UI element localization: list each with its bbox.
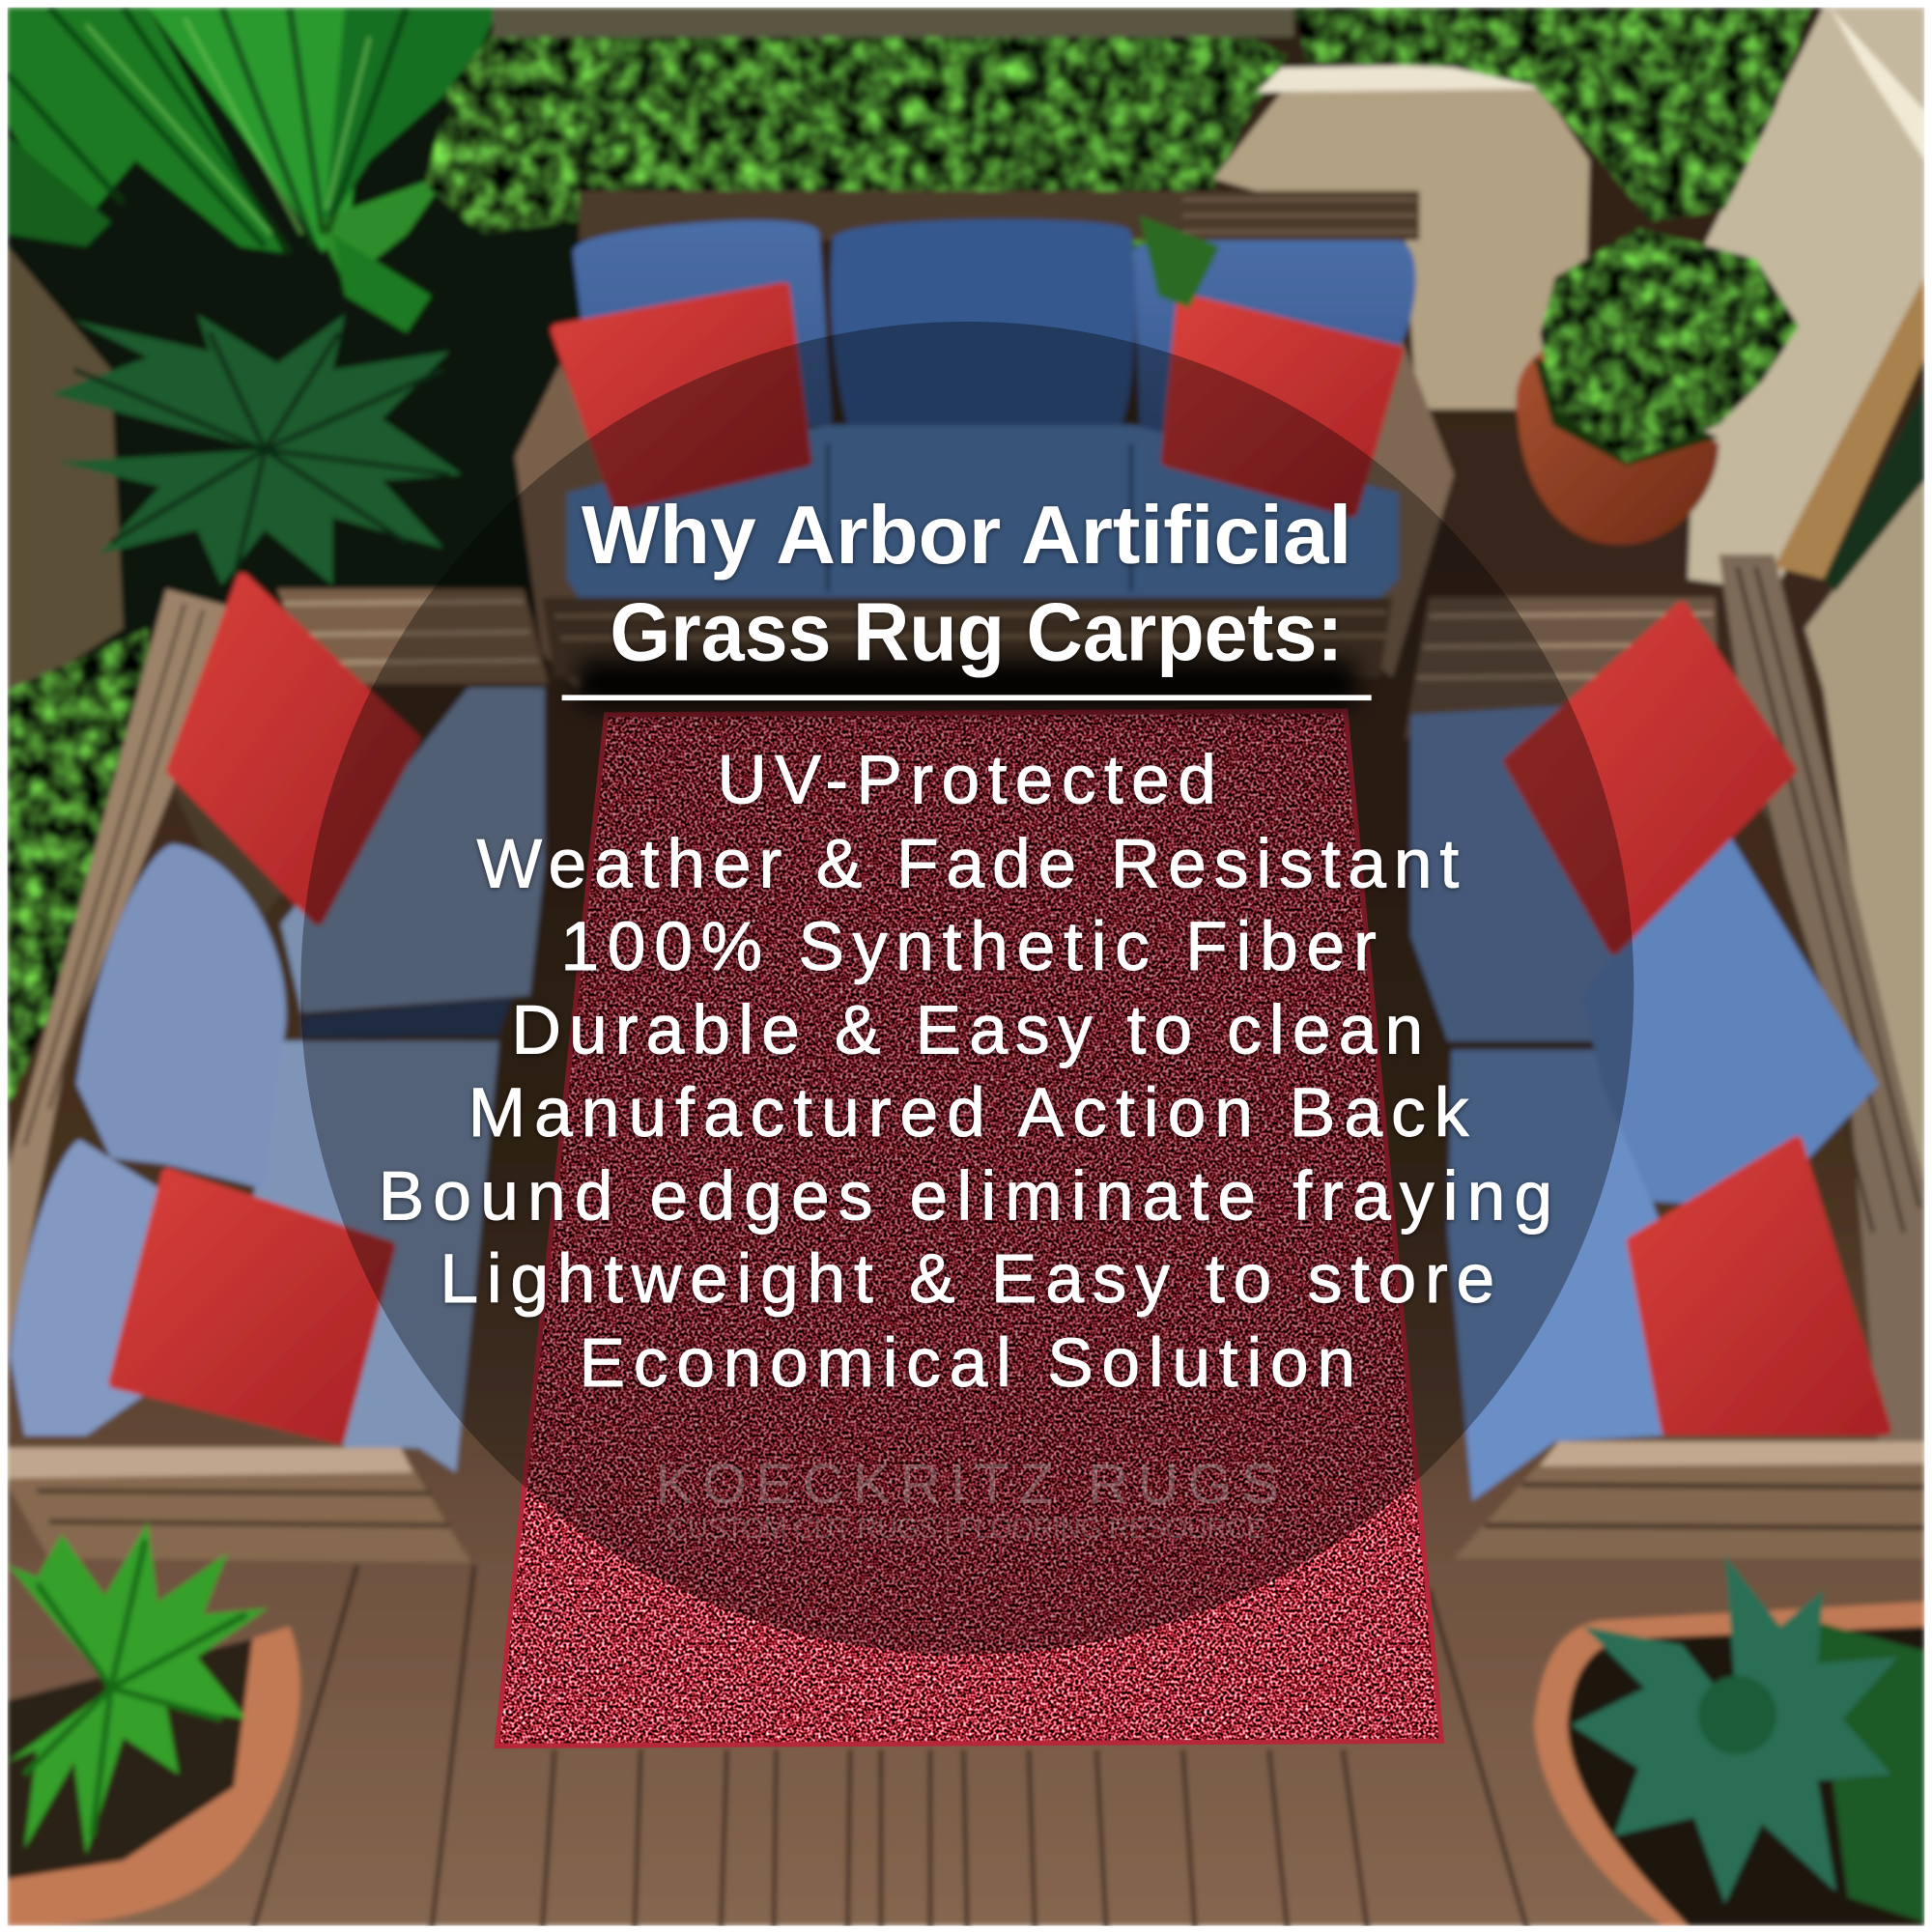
left dark garden backdrop bbox=[8, 8, 579, 690]
feature list: Lightweight & Easy to store bbox=[440, 1240, 1494, 1318]
icon: red pillow right bbox=[1167, 299, 1397, 511]
dark translucent circle overlay bbox=[300, 322, 1634, 1655]
top hedge bbox=[421, 33, 1289, 257]
rug bbox=[497, 711, 1441, 1746]
rug watermark bbox=[656, 1453, 1279, 1545]
icon: red pillow upper right bbox=[1509, 608, 1790, 949]
feature list: 100% Synthetic Fiber bbox=[560, 908, 1377, 985]
icon: blue pillow right bbox=[1583, 838, 1879, 1208]
plant: spiky dark palm bbox=[49, 314, 462, 585]
title bbox=[582, 490, 1351, 679]
icon: red pillow lower left bbox=[115, 1175, 389, 1438]
feature list: Durable & Easy to clean bbox=[511, 992, 1423, 1069]
left sofa bbox=[8, 579, 549, 1562]
balcony walls bbox=[493, 8, 1924, 1233]
icon: red pillow upper left bbox=[173, 579, 414, 920]
icon: red pillow lower right bbox=[1633, 1142, 1886, 1430]
feature list: Weather & Fade Resistant bbox=[477, 825, 1459, 902]
title divider bbox=[562, 695, 1372, 700]
plant: bottom-left potted spikes bbox=[8, 1521, 300, 1926]
plant: bottom-right succulent pot bbox=[1534, 1555, 1924, 1926]
rug watermark: CUSTOM CUT RUGS | FLOORING RESOURCE bbox=[668, 1513, 1265, 1545]
plant: top-left palm fronds bbox=[8, 8, 499, 332]
title shadow band bbox=[579, 659, 1355, 706]
top sofa bbox=[515, 191, 1454, 690]
plant: top-right vines bbox=[1293, 8, 1811, 222]
right sofa bbox=[1405, 554, 1924, 1559]
feature list: UV-Protected bbox=[717, 742, 1216, 819]
title: Grass Rug Carpets: bbox=[610, 587, 1343, 679]
feature list: Economical Solution bbox=[579, 1324, 1355, 1402]
icon: red pillow left bbox=[557, 288, 806, 505]
rug watermark: KOECKRITZ RUGS bbox=[656, 1453, 1279, 1516]
feature list bbox=[379, 742, 1552, 1402]
plant: right terracotta pot bbox=[1516, 228, 1799, 545]
title: Why Arbor Artificial bbox=[582, 490, 1351, 582]
plant: left hedge bbox=[8, 629, 154, 1109]
feature list: Bound edges eliminate fraying bbox=[379, 1158, 1552, 1236]
feature list: Manufactured Action Back bbox=[469, 1074, 1469, 1151]
